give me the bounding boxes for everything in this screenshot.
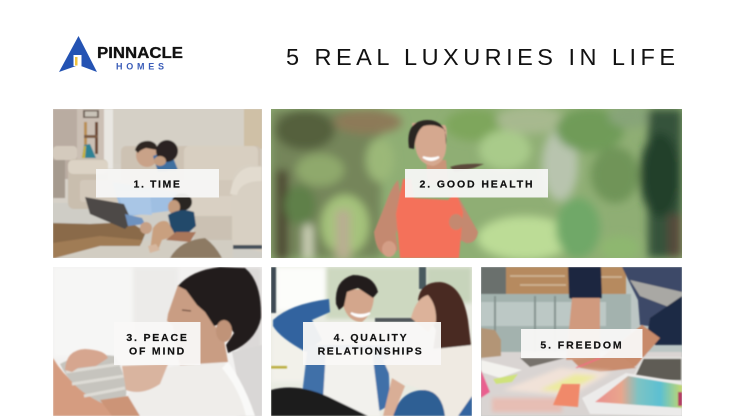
label: 1. Time: 1. TIME	[134, 178, 181, 190]
label: 5. Freedom: 5. FREEDOM	[540, 340, 624, 352]
label: 5. Freedom	[521, 329, 642, 358]
title: 5 REAL LUXURIES IN LIFE	[286, 44, 675, 70]
icon: blue peak with door	[59, 36, 97, 72]
logo subtitle: HOMES	[116, 62, 164, 72]
label: 4. Quality Relationships	[303, 322, 441, 365]
panel: 3. Peace of Mind	[53, 267, 262, 416]
label: 3. Peace of Mind: 3. PEACE	[126, 332, 189, 344]
panel: 4. Quality Relationships	[271, 267, 472, 416]
panel: 2. Good Health	[271, 104, 682, 260]
label: 3. Peace of Mind: OF MIND	[129, 346, 186, 358]
logo wordmark: PINNACLE	[97, 45, 183, 62]
panel: 1. Time	[53, 109, 262, 258]
label: 1. Time	[96, 169, 219, 198]
label: 4. Quality Relationships: 4. QUALITY	[334, 332, 408, 344]
label: 3. Peace of Mind	[114, 322, 200, 365]
panel: 5. Freedom	[481, 267, 682, 416]
label: 2. Good Health	[405, 169, 548, 198]
label: 2. Good Health: 2. GOOD HEALTH	[419, 178, 535, 190]
label: 4. Quality Relationships: RELATIONSHIPS	[318, 346, 423, 358]
logo: Pinnacle Homes	[59, 36, 183, 72]
